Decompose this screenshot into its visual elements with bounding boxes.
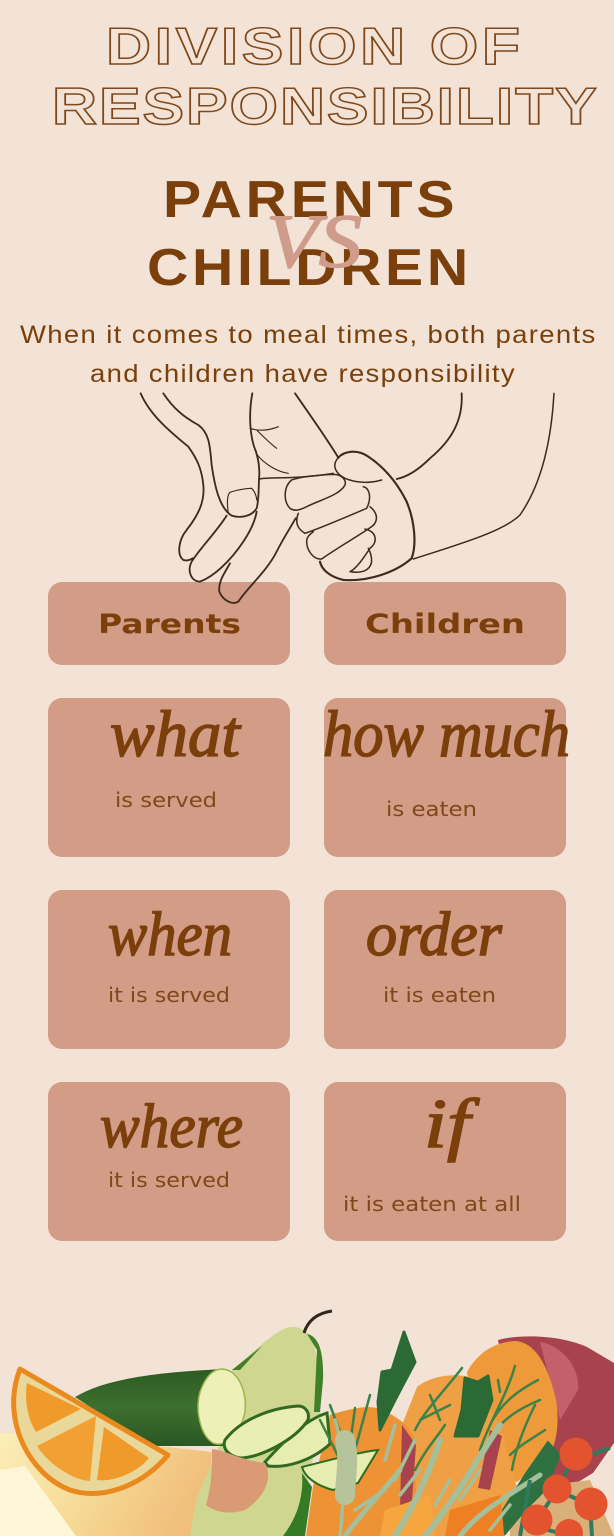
panel: children header	[324, 582, 566, 665]
intro text	[20, 320, 595, 388]
icon: holding hands line drawing	[141, 393, 554, 603]
panel: when it is served: it is served	[108, 983, 230, 1007]
icon: cucumber	[75, 1369, 378, 1490]
panel: how much is eaten: is eaten	[386, 797, 477, 821]
panel: where it is served	[48, 1082, 290, 1241]
heading: parents vs children: VS	[266, 200, 362, 284]
panel: when it is served	[48, 890, 290, 1049]
panel: parents header	[48, 582, 290, 665]
panel: order it is eaten: it is eaten	[383, 983, 496, 1007]
intro text: and children have responsibility	[90, 359, 515, 388]
icon: pear	[190, 1311, 332, 1536]
title	[52, 18, 597, 136]
panel: how much is eaten: how much	[323, 698, 570, 771]
title: RESPONSIBILITY	[52, 78, 597, 136]
icon: ginger slice	[206, 1449, 268, 1512]
heading: parents vs children	[147, 170, 468, 296]
icon: roast squash	[306, 1375, 614, 1536]
illustration: fruit and vegetables	[0, 1311, 614, 1536]
panel: order it is eaten	[324, 890, 566, 1049]
panel: what is served: is served	[115, 788, 217, 812]
panel: where it is served: where	[100, 1093, 243, 1161]
icon: ginger	[0, 1433, 212, 1536]
panel: how much is eaten	[323, 698, 570, 857]
panel: what is served: what	[110, 698, 242, 771]
panel: what is served	[48, 698, 290, 857]
panel: if it is eaten at all	[324, 1082, 566, 1241]
icon: cherry tomatoes	[520, 1438, 610, 1536]
heading: parents vs children: CHILDREN	[147, 238, 468, 296]
panel: parents header: Parents	[98, 609, 241, 640]
panel: when it is served: when	[108, 901, 232, 969]
title: DIVISION OF	[106, 18, 520, 76]
icon: orange slice	[14, 1369, 168, 1493]
panel: if it is eaten at all: it is eaten at all	[343, 1192, 521, 1216]
icon: sweet potato	[467, 1336, 614, 1490]
icon: rosemary	[320, 1332, 560, 1536]
panel: if it is eaten at all: if	[424, 1086, 480, 1163]
panel: where it is served: it is served	[108, 1168, 230, 1192]
heading: parents vs children: PARENTS	[163, 170, 455, 228]
intro text: When it comes to meal times, both parents	[20, 320, 595, 349]
panel: children header: Children	[365, 609, 525, 640]
panel: order it is eaten: order	[366, 901, 503, 969]
